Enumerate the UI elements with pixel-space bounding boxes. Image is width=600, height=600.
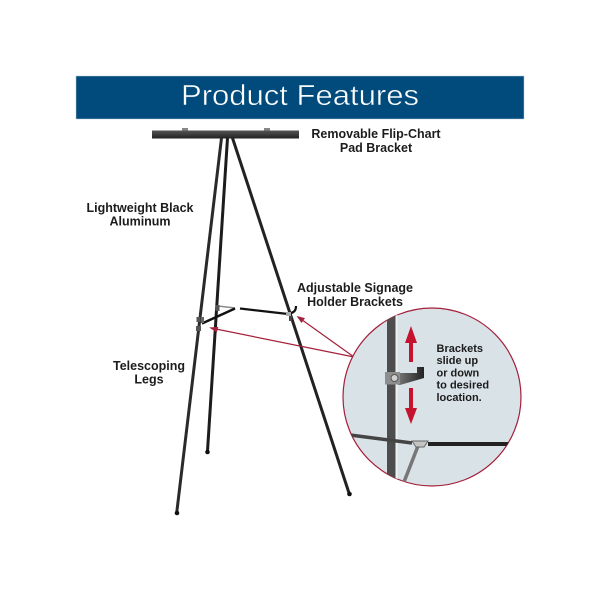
label: signage brackets: Holder Brackets xyxy=(307,295,403,309)
callout pointer arrows xyxy=(211,317,354,357)
callout circle xyxy=(343,300,521,490)
label: telescoping legs: Telescoping xyxy=(113,359,185,373)
callout text: location. xyxy=(436,392,482,404)
label: aluminum: Aluminum xyxy=(109,214,171,228)
down arrow xyxy=(405,388,417,424)
diagonal brace xyxy=(404,446,418,482)
title banner: Product Features xyxy=(181,80,419,112)
up arrow xyxy=(405,326,417,362)
label: aluminum: Lightweight Black xyxy=(87,201,193,215)
crossbar and brace xyxy=(196,305,296,331)
callout text: or down xyxy=(436,367,480,379)
horizontal rails xyxy=(350,435,412,443)
label: flip-chart bracket: Pad Bracket xyxy=(340,141,413,155)
vertical pole xyxy=(387,316,396,478)
label: telescoping legs: Legs xyxy=(134,372,164,386)
callout text: slide up xyxy=(436,355,478,367)
label: flip-chart bracket: Removable Flip-Chart xyxy=(311,127,441,141)
feet xyxy=(175,450,352,515)
callout text: to desired xyxy=(436,380,489,392)
hinge xyxy=(412,441,428,447)
left leg xyxy=(177,138,222,512)
callout text: Brackets xyxy=(436,343,483,355)
easel xyxy=(152,128,352,515)
label: signage brackets: Adjustable Signage xyxy=(297,281,413,295)
middle leg xyxy=(208,138,228,451)
title banner xyxy=(76,76,524,119)
sliding bracket xyxy=(385,367,424,385)
flip-chart pad bracket xyxy=(152,128,299,138)
right leg xyxy=(232,138,349,493)
